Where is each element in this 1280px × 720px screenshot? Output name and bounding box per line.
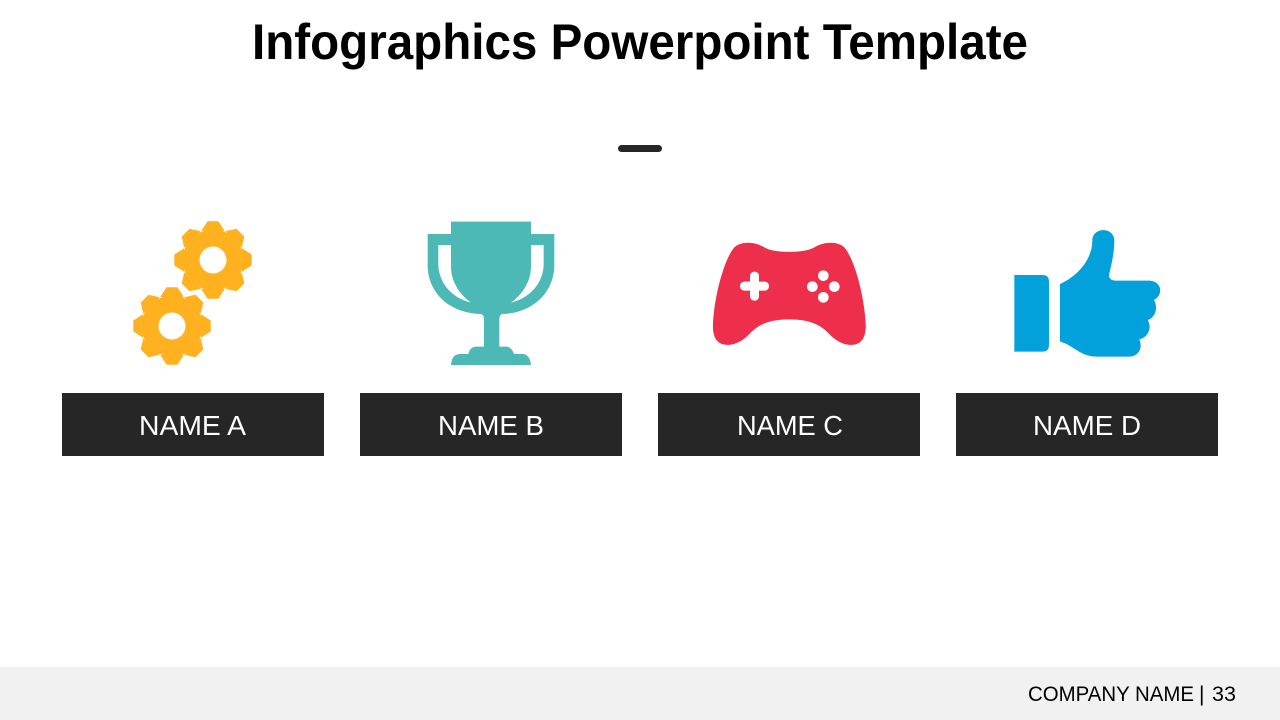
label: name d: NAME D	[1033, 410, 1141, 441]
subtitle dash	[618, 145, 662, 152]
footer text: |	[1199, 683, 1204, 706]
footer bar	[0, 667, 1280, 720]
footer text: COMPANY NAME	[1028, 683, 1194, 706]
footer text: 33	[1212, 683, 1236, 706]
label: name d	[956, 393, 1218, 456]
icon: gears	[133, 221, 252, 365]
icon: thumbs up	[1014, 230, 1160, 357]
icon: game controller	[713, 243, 866, 345]
label: name b: NAME B	[438, 410, 544, 441]
title: Infographics Powerpoint Template	[252, 14, 1028, 70]
label: name b	[360, 393, 622, 456]
label: name a: NAME A	[139, 410, 246, 441]
label: name c: NAME C	[737, 410, 843, 441]
label: name c	[658, 393, 920, 456]
label: name a	[62, 393, 324, 456]
icon: trophy	[428, 222, 554, 365]
